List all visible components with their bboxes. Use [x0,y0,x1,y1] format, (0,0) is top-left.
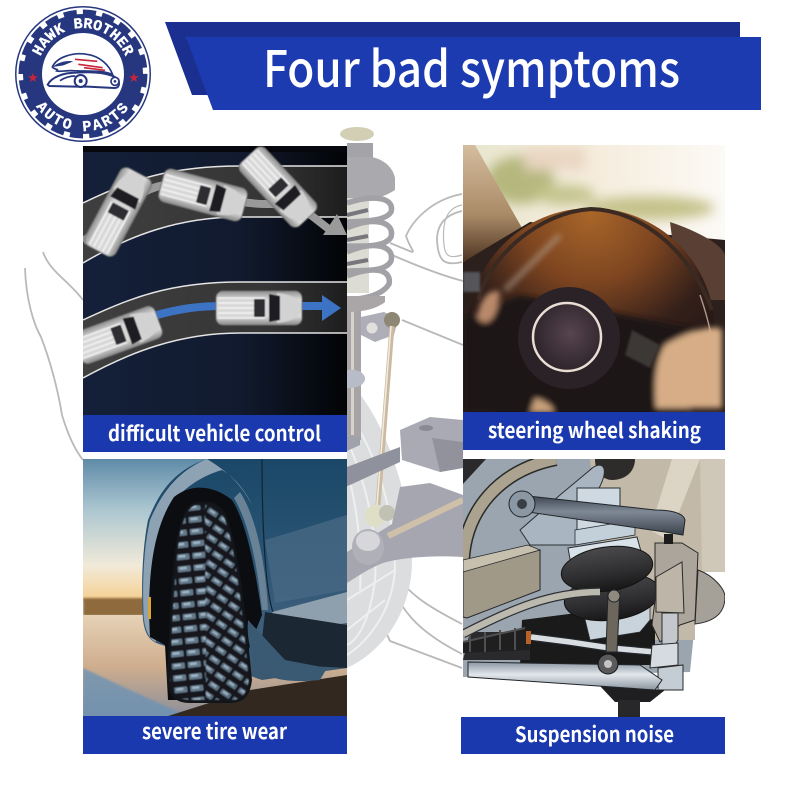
car outline lines [25,194,463,668]
caption: steering wheel shaking [488,415,701,445]
panel: difficult vehicle control [72,144,347,452]
caption [83,716,347,754]
logo: Hawk Brother Auto Parts [15,6,151,142]
illustration: air suspension [463,459,725,718]
caption [461,717,725,754]
caption: difficult vehicle control [108,418,321,448]
stabiliser link [361,312,400,527]
control arm and bracket [347,417,463,583]
caption: Suspension noise [515,719,674,749]
shock strut and coil spring [340,127,395,451]
logo ring text top: HAWK BROTHER [32,18,134,57]
tire behind suspension [347,380,412,668]
photo: steering wheel [463,145,725,412]
logo emblem: eagle and car [48,54,119,88]
panel: severe tire wear [83,459,347,754]
logo star left: ★ [27,71,39,86]
panel: suspension noise [461,459,725,754]
photo: tire on snowy road [83,459,347,717]
logo ring text bottom: AUTO PARTS [36,102,128,132]
logo star right: ★ [128,71,140,86]
photo: cars on curved road [72,144,347,416]
title text: Four bad symptoms [263,30,680,102]
panel: steering wheel shaking [463,145,725,456]
caption: severe tire wear [142,716,288,746]
title banner [165,22,761,110]
background: faded suspension line drawing [25,127,463,668]
